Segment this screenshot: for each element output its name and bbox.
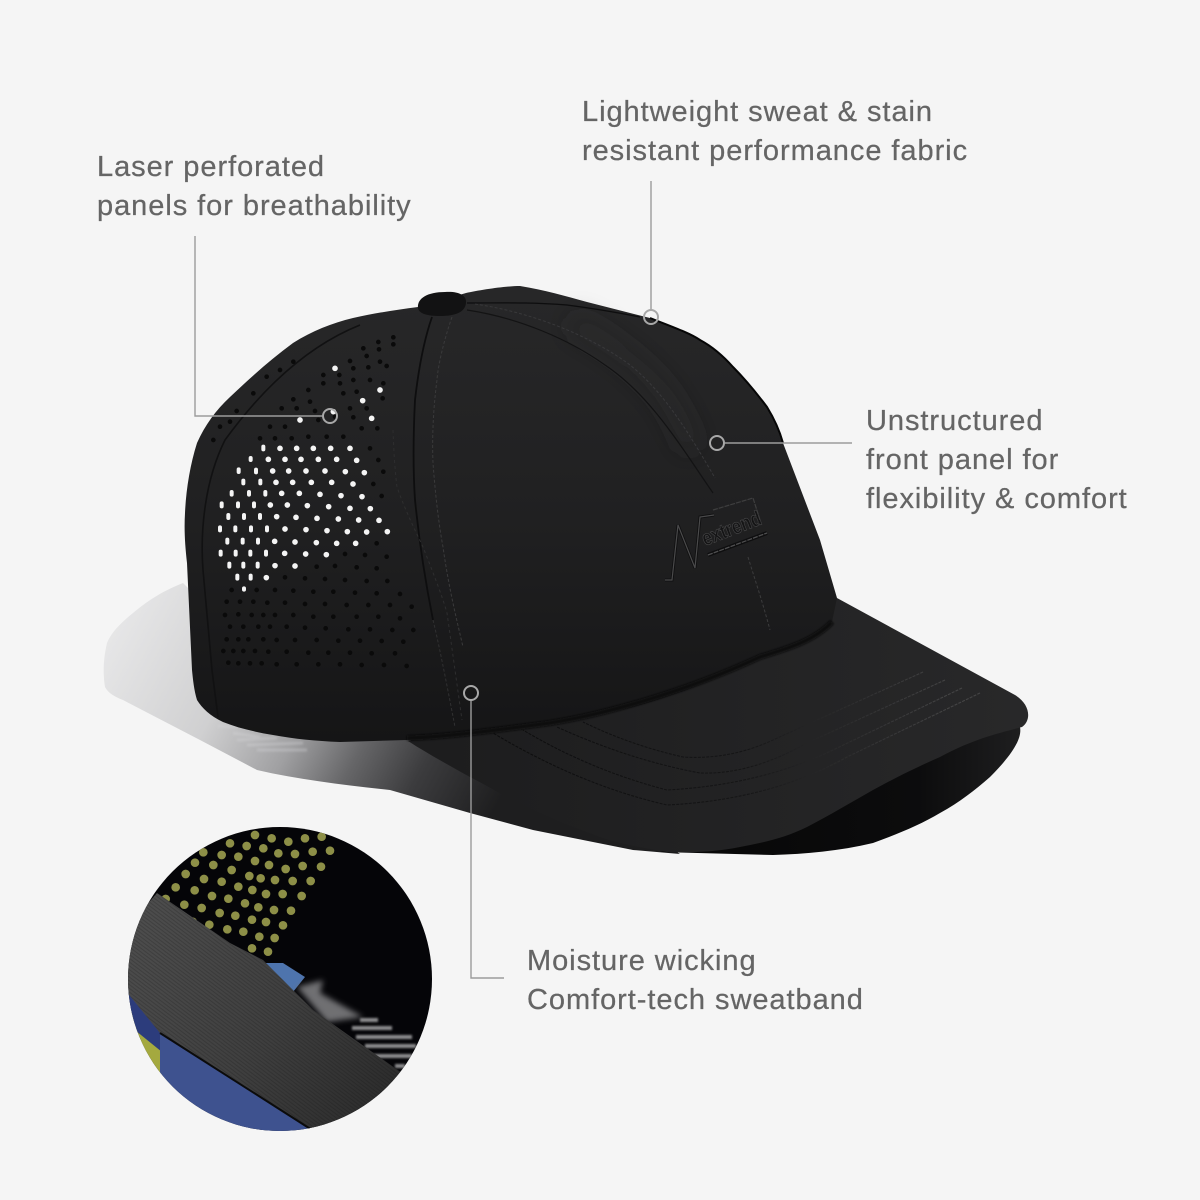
text: moisture wicking sweatband: Comfort-tech sweatband [527,984,864,1016]
embroidered logo [665,498,767,580]
callout: laser perforated panels [195,236,337,423]
embroidered logo: extrend [699,507,765,551]
text: moisture wicking sweatband: Moisture wicking [527,945,757,977]
blue strip [266,963,305,991]
text: lightweight fabric [582,96,968,167]
perforated mesh with yellow holes [166,835,330,952]
button on top of the crown [418,292,466,316]
callout: sweatband [464,686,504,978]
text: laser perforated panels: Laser perforated [97,151,325,183]
text: laser perforated panels [97,151,412,222]
inset background [120,820,440,1140]
baseball cap [185,286,1028,855]
brim top surface [408,598,1028,852]
text: lightweight fabric: resistant performance fabric [582,135,968,167]
text: unstructured front panel [866,405,1128,515]
brim stitching [493,672,980,805]
laser perforations: round light holes [266,368,387,578]
text: unstructured front panel: Unstructured [866,405,1043,437]
inset detail: sweatband close-up [120,820,440,1140]
crown [185,286,837,742]
hat shadow on the floor [104,583,680,854]
laser perforations: narrow light holes on the left [220,447,267,590]
text: unstructured front panel: flexibility & comfort [866,483,1128,515]
blue denim panel [160,1034,308,1131]
laser perforations: dark holes [213,337,413,666]
brim underside [660,727,1020,855]
olive fabric [130,1010,162,1075]
text: unstructured front panel: front panel for [866,444,1059,476]
callout: performance fabric [644,181,658,324]
navy fabric edge [128,990,160,1050]
metallic stripes [352,1020,416,1066]
text: laser perforated panels: panels for breathability [97,190,412,222]
text: lightweight fabric: Lightweight sweat & stain [582,96,933,128]
callout: unstructured front panel [710,436,852,450]
knit rib texture [128,894,325,1100]
text: moisture wicking sweatband [527,945,864,1016]
grey blur [297,980,363,1022]
crown seams and stitching [202,303,832,738]
knit sweatband [125,893,402,1132]
